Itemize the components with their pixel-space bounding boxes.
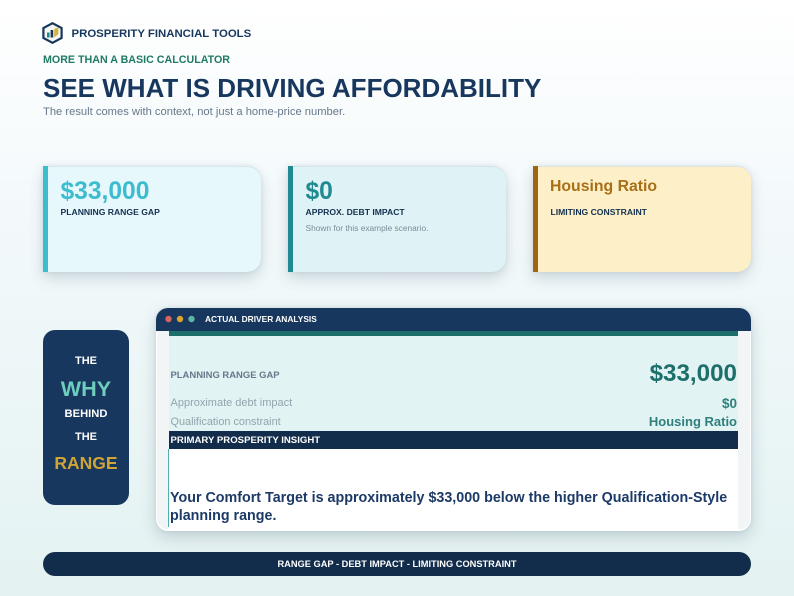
title: SEE WHAT IS DRIVING AFFORDABILITY xyxy=(43,73,541,103)
label: APPROX. DEBT IMPACT xyxy=(306,207,405,217)
value: $0 xyxy=(306,178,333,205)
window title: ACTUAL DRIVER ANALYSIS xyxy=(205,314,317,324)
debt label: Approximate debt impact xyxy=(170,397,292,409)
panel: planning range gap xyxy=(43,166,261,272)
metric label: PLANNING RANGE GAP xyxy=(170,370,280,381)
panel: limiting constraint xyxy=(533,166,751,272)
metric value: $33,000 xyxy=(650,360,737,387)
brand name: PROSPERITY FINANCIAL TOOLS xyxy=(72,28,251,40)
the: THE xyxy=(75,355,97,367)
insight accent line xyxy=(168,449,169,527)
subtitle: The result comes with context, not just a home-price number. xyxy=(43,106,345,118)
panel: why behind the range xyxy=(43,330,129,505)
insight header xyxy=(169,431,738,449)
the: THE xyxy=(75,431,97,443)
side strip left xyxy=(157,331,169,529)
window dots xyxy=(165,316,195,322)
insight text: Your Comfort Target is approximately $33,000 below the higher Qualification-Style planning range. xyxy=(170,490,727,524)
range: RANGE xyxy=(54,453,118,473)
logo icon: hexagon with bars xyxy=(42,22,63,44)
panel: debt impact xyxy=(288,166,506,272)
panel: actual driver analysis window xyxy=(156,308,751,531)
footer bar xyxy=(43,552,751,576)
value: Housing Ratio xyxy=(550,178,657,195)
behind: BEHIND xyxy=(65,408,107,420)
card accent xyxy=(43,166,48,272)
insight heading: PRIMARY PROSPERITY INSIGHT xyxy=(170,435,320,446)
debt value: $0 xyxy=(722,396,737,411)
eyebrow: MORE THAN A BASIC CALCULATOR xyxy=(43,54,230,66)
side strip right xyxy=(738,331,750,529)
constraint value: Housing Ratio xyxy=(649,414,737,429)
window header xyxy=(156,308,751,331)
constraint label: Qualification constraint xyxy=(170,416,281,428)
note: Shown for this example scenario. xyxy=(306,223,428,233)
card accent xyxy=(533,166,538,272)
footer bar: RANGE GAP - DEBT IMPACT - LIMITING CONSTRAINT xyxy=(277,558,516,568)
label: LIMITING CONSTRAINT xyxy=(550,207,647,217)
value: $33,000 xyxy=(60,178,149,205)
why: WHY xyxy=(61,376,111,401)
green strip xyxy=(169,331,738,336)
card accent xyxy=(288,166,293,272)
metrics panel xyxy=(169,331,738,431)
label: PLANNING RANGE GAP xyxy=(60,207,160,217)
